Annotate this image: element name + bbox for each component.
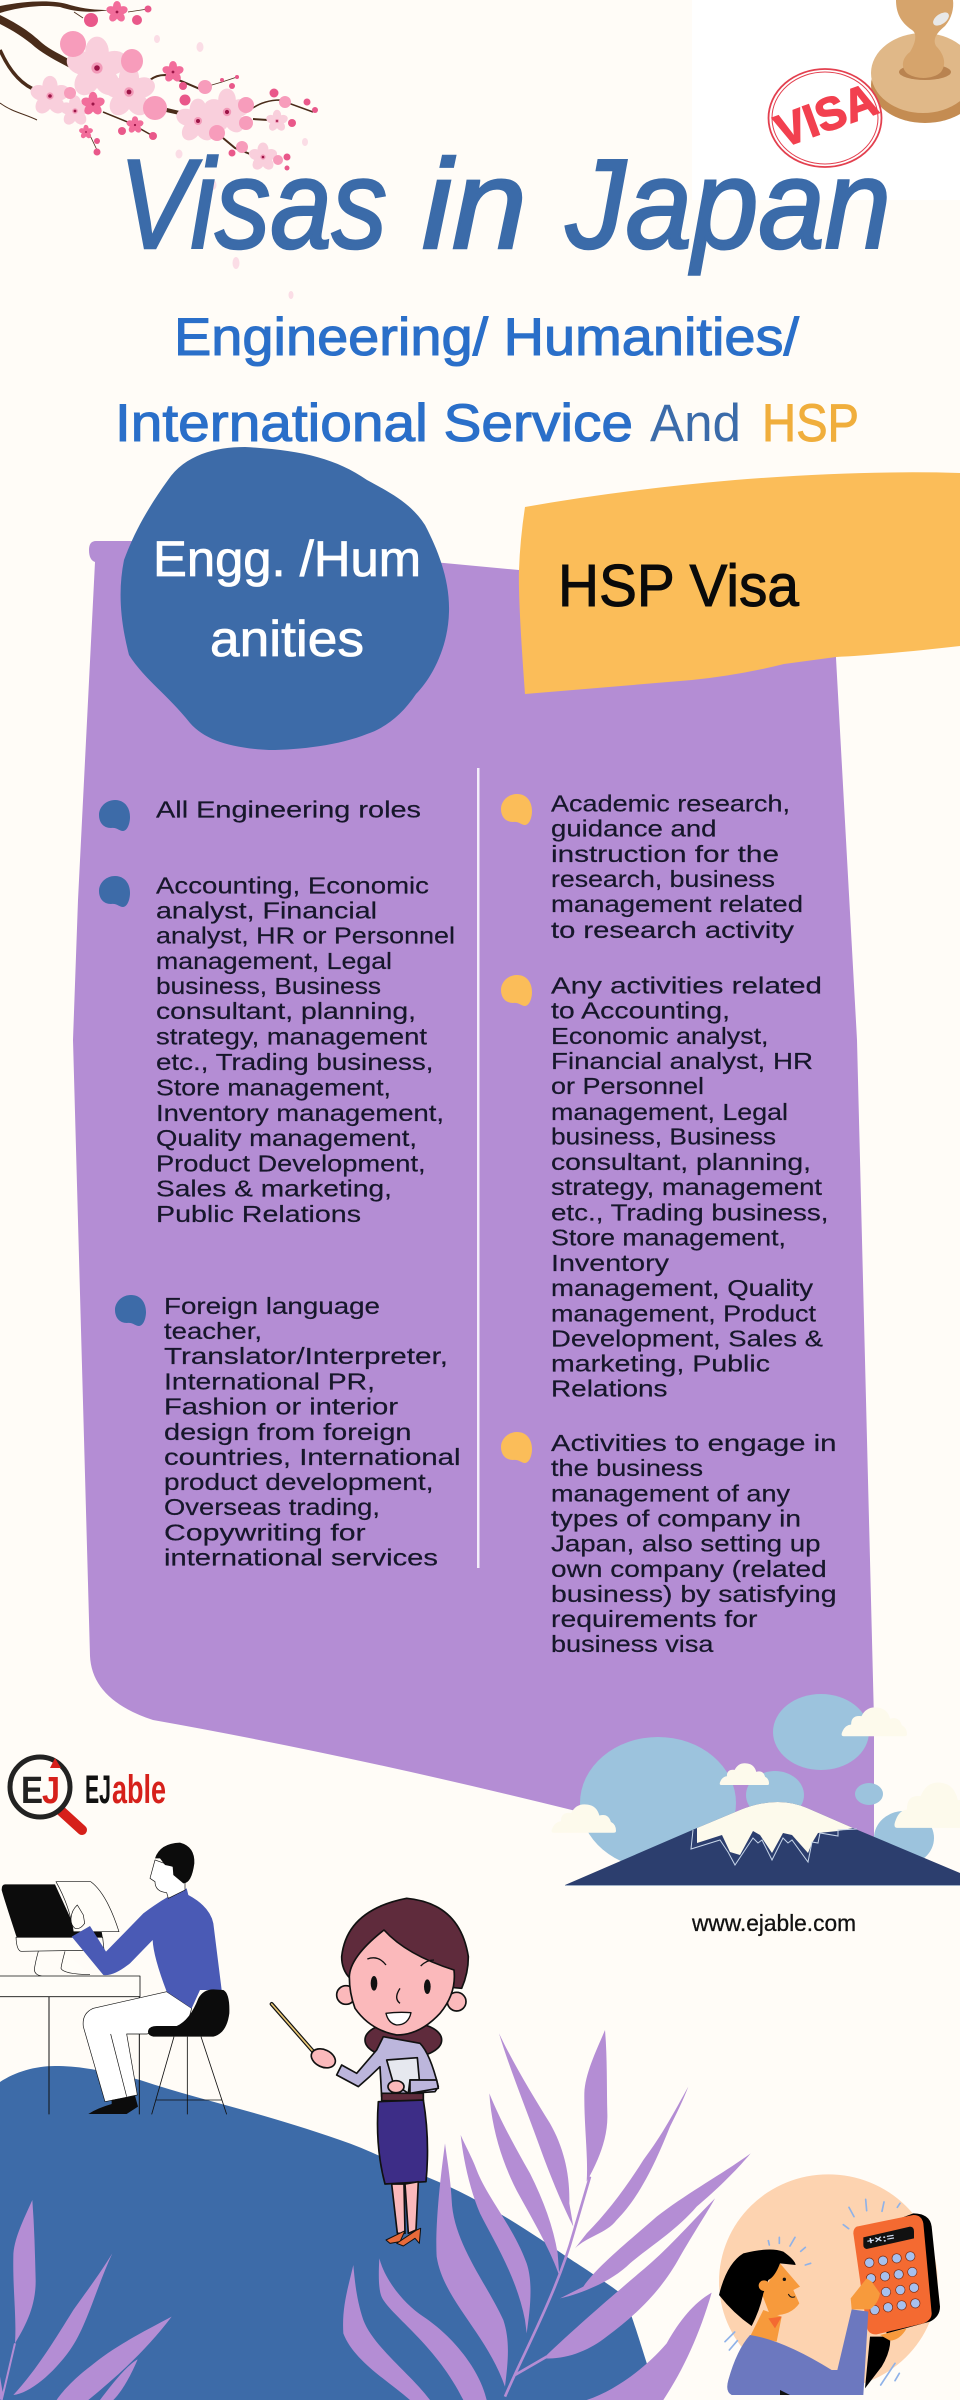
- illustration: visa rubber stamp: [768, 0, 960, 167]
- bullet: any activities: [501, 975, 532, 1006]
- blue hill: [0, 2066, 655, 2400]
- subtitle: [115, 308, 859, 453]
- logo: EJable: able: [112, 1768, 166, 1812]
- heading blob: Engg./Humanities: anities: [210, 611, 364, 667]
- title: in: [422, 133, 527, 275]
- text: any activities: marketing, Public: [551, 1351, 770, 1377]
- text: business activities: the business: [551, 1455, 703, 1481]
- text: any activities: management, Legal: [551, 1099, 788, 1125]
- text: humanities roles: Store management,: [156, 1074, 391, 1100]
- logo: EJable: J: [42, 1770, 60, 1812]
- text: business activities: requirements for: [551, 1606, 758, 1632]
- text: any activities: or Personnel: [551, 1073, 704, 1099]
- text: any activities: to Accounting,: [551, 998, 730, 1024]
- text: all engineering roles: All Engineering roles: [156, 796, 421, 822]
- text: academic research: guidance and: [551, 815, 716, 841]
- illustration: man at computer: [0, 1843, 229, 2114]
- text: academic research: research, business: [551, 866, 775, 892]
- text: humanities roles: consultant, planning,: [156, 998, 416, 1024]
- logo: EJable: E: [21, 1770, 43, 1812]
- illustration: Mount Fuji with sky and clouds: [552, 1694, 960, 1886]
- text: academic research: to research activity: [551, 917, 795, 943]
- text: business activities: Japan, also setting up: [551, 1531, 821, 1557]
- text: international services roles: Foreign language: [164, 1293, 380, 1319]
- text: humanities roles: analyst, Financial: [156, 898, 377, 924]
- bullet: accounting: [99, 876, 130, 907]
- text: business activities: business) by satisfying: [551, 1581, 836, 1607]
- text: any activities: Store management,: [551, 1224, 786, 1250]
- text: international services roles: international services: [164, 1545, 438, 1571]
- title: Japan: [565, 133, 891, 275]
- text: any activities: management, Product: [551, 1300, 817, 1326]
- bullet: all engineering: [99, 800, 130, 831]
- illustration: palm leaves right: [343, 2030, 751, 2400]
- text: business activities: [551, 1430, 836, 1657]
- bullet: academic research: [501, 794, 532, 825]
- text: academic research: [551, 790, 803, 943]
- text: international services roles: countries, International: [164, 1444, 460, 1470]
- text: international services roles: Overseas trading,: [164, 1494, 380, 1520]
- text: humanities roles: analyst, HR or Personnel: [156, 923, 455, 949]
- illustration: person with calculator: [719, 2174, 940, 2395]
- text: any activities: [551, 973, 828, 1402]
- bullet: business activities: [501, 1432, 532, 1463]
- heading blob: HSP Visa: [519, 472, 960, 694]
- panel: purple content background: [73, 541, 874, 1840]
- text: international services roles: teacher,: [164, 1318, 262, 1344]
- text: any activities: management, Quality: [551, 1275, 814, 1301]
- subtitle: And: [650, 394, 741, 453]
- bullet: foreign language: [115, 1295, 146, 1326]
- text: business activities: business visa: [551, 1631, 714, 1657]
- text: international services roles: [164, 1293, 460, 1571]
- title: Visas: [119, 133, 387, 275]
- logo: EJable: EJ: [85, 1768, 111, 1812]
- text: any activities: Financial analyst, HR: [551, 1048, 813, 1074]
- text: humanities roles: Public Relations: [156, 1201, 361, 1227]
- text: humanities roles: Product Development,: [156, 1150, 426, 1176]
- text: business activities: management of any: [551, 1480, 791, 1506]
- text: international services roles: International PR,: [164, 1368, 375, 1394]
- text: business activities: Activities to engage in: [551, 1430, 836, 1456]
- text: any activities: business, Business: [551, 1124, 776, 1150]
- text: academic research: instruction for the: [551, 841, 779, 867]
- illustration: visa rubber stamp: VISA: [768, 73, 884, 157]
- illustration: person with calculator: +×:=: [866, 2232, 896, 2248]
- text: academic research: Academic research,: [551, 790, 790, 816]
- text: business activities: types of company in: [551, 1506, 801, 1532]
- text: humanities roles: strategy, management: [156, 1024, 428, 1050]
- text: humanities roles: Inventory management,: [156, 1100, 444, 1126]
- text: humanities roles: business, Business: [156, 973, 381, 999]
- text: any activities: strategy, management: [551, 1174, 823, 1200]
- text: any activities: Inventory: [551, 1250, 670, 1276]
- column divider: [477, 768, 480, 1568]
- text: any activities: etc., Trading business,: [551, 1199, 828, 1225]
- subtitle: Engineering/ Humanities/: [174, 308, 799, 367]
- logo: EJable: [10, 1757, 166, 1830]
- illustration: woman with pointer: [272, 1898, 468, 2246]
- text: humanities roles: Sales & marketing,: [156, 1176, 392, 1202]
- text: international services roles: Copywriting for: [164, 1519, 366, 1545]
- text: international services roles: Fashion or interior: [164, 1394, 398, 1420]
- text: any activities: Any activities related: [551, 973, 822, 999]
- illustration: cherry blossom branch: [0, 1, 318, 299]
- title: [119, 133, 891, 275]
- text: any activities: consultant, planning,: [551, 1149, 811, 1175]
- heading blob: Engg./Humanities: [121, 447, 449, 750]
- illustration: palm leaves left: [0, 2200, 172, 2400]
- text: any activities: Economic analyst,: [551, 1023, 768, 1049]
- text: international services roles: design from foreign: [164, 1419, 412, 1445]
- text: international services roles: Translator/Interpreter,: [164, 1343, 448, 1369]
- text: humanities roles: Accounting, Economic: [156, 873, 429, 899]
- text: international services roles: product development,: [164, 1469, 434, 1495]
- text: academic research: management related: [551, 891, 803, 917]
- website url: www.ejable.com: [691, 1910, 856, 1936]
- text: business activities: own company (related: [551, 1556, 827, 1582]
- text: humanities roles: etc., Trading business,: [156, 1049, 434, 1075]
- text: any activities: Development, Sales &: [551, 1326, 823, 1352]
- heading blob: HSP Visa: HSP Visa: [558, 553, 799, 619]
- heading blob: Engg./Humanities: Engg. /Hum: [153, 531, 421, 587]
- text: humanities roles: [156, 873, 455, 1227]
- text: any activities: Relations: [551, 1376, 668, 1402]
- subtitle: International Service: [115, 394, 633, 453]
- subtitle: HSP: [762, 394, 859, 453]
- text: humanities roles: management, Legal: [156, 948, 392, 974]
- text: humanities roles: Quality management,: [156, 1125, 417, 1151]
